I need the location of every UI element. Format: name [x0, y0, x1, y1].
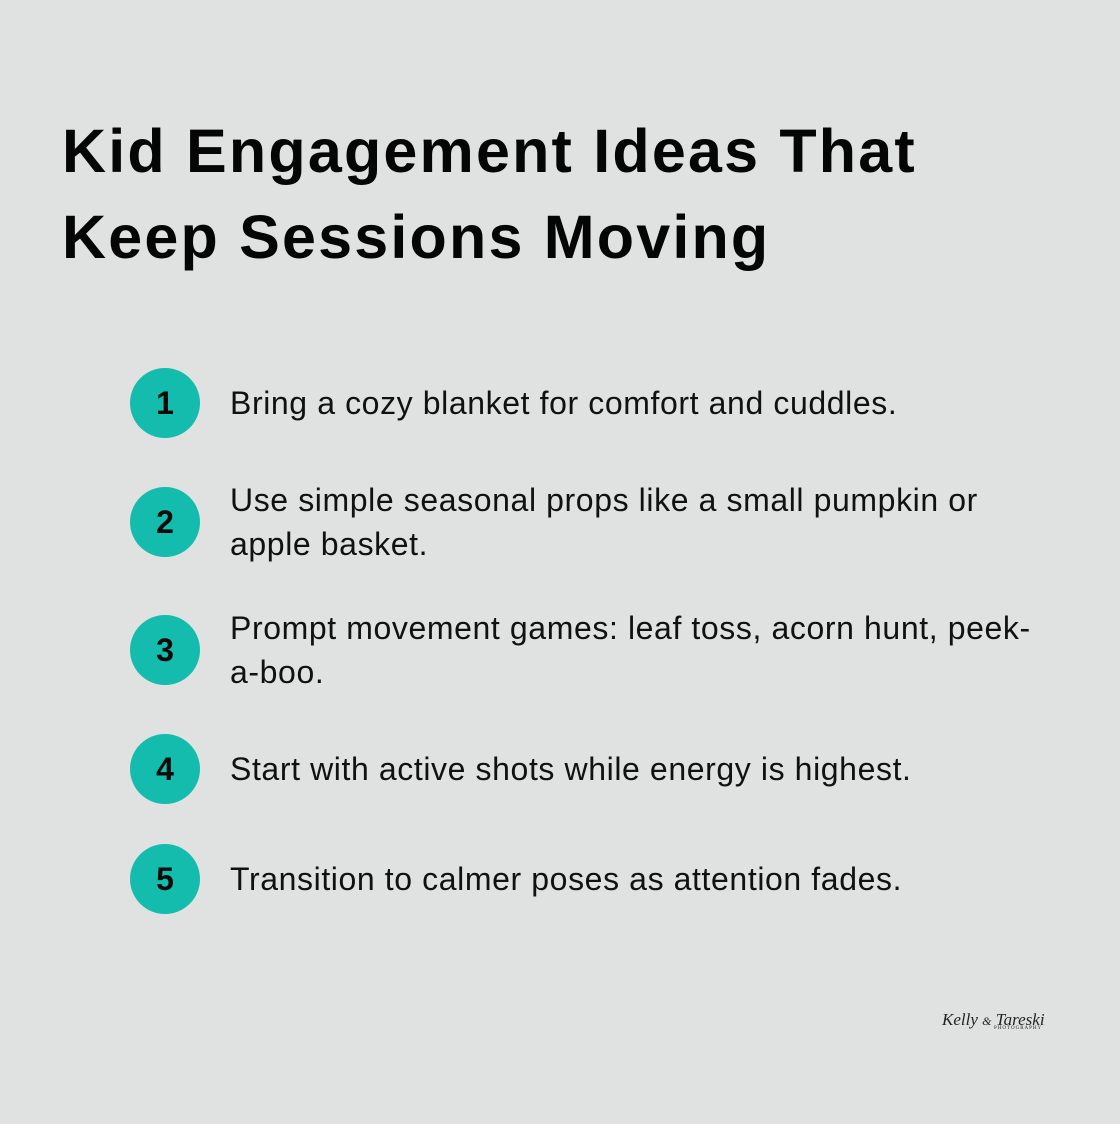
item 1: Bring a cozy blanket for comfort and cuddles. [230, 385, 897, 421]
item 3: Prompt movement games: leaf toss, acorn hunt, peek-a-boo. [230, 610, 1031, 690]
logo: PHOTOGRAPHY [994, 1026, 1042, 1031]
item 5: Transition to calmer poses as attention fades. [230, 861, 902, 897]
item 2: Use simple seasonal props like a small pumpkin or apple basket. [230, 482, 978, 562]
item 1 [130, 368, 897, 438]
title [62, 117, 917, 271]
logo: Kelly & Tareski [942, 1010, 1045, 1029]
item 1: 1 [156, 385, 174, 421]
item 4: 4 [156, 751, 174, 787]
item 4: Start with active shots while energy is highest. [230, 751, 912, 787]
title: Kid Engagement Ideas That [62, 117, 917, 185]
item 3: 3 [156, 632, 174, 668]
item 5: 5 [156, 861, 174, 897]
item 5 [130, 844, 902, 914]
item 2: 2 [156, 504, 174, 540]
item 4 [130, 734, 912, 804]
title: Keep Sessions Moving [62, 203, 770, 271]
